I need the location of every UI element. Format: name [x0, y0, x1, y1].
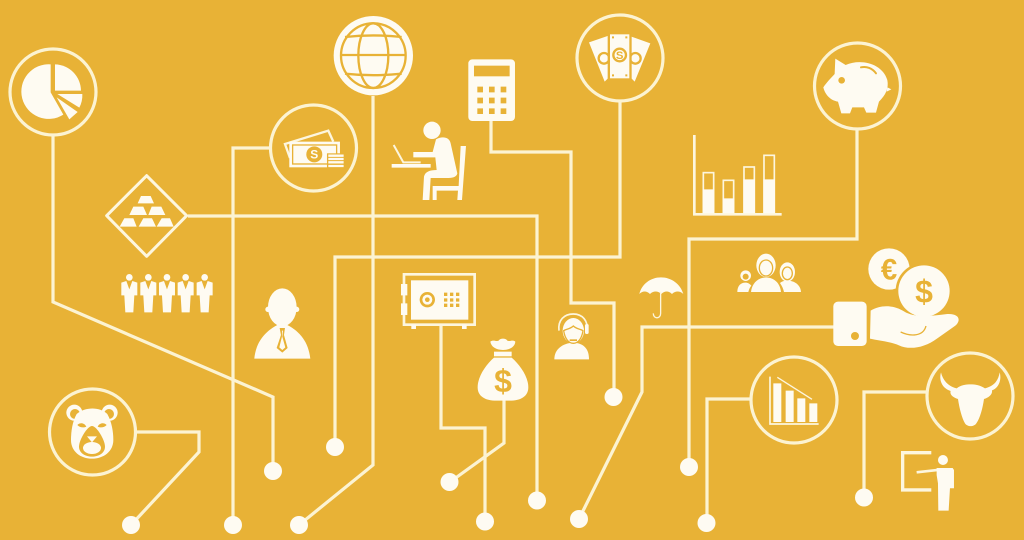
icon: fanned banknotes in circle: S — [616, 50, 624, 62]
connector: hand to node — [570, 327, 835, 528]
hand — [833, 302, 959, 348]
connector: bear to node — [122, 432, 199, 534]
connector: safe to node — [441, 325, 494, 530]
coin: dollar: $ — [915, 273, 933, 309]
icon: cash stack in circle: S — [310, 148, 318, 162]
icon: hand holding euro and dollar coins — [833, 248, 959, 348]
icon: person working at laptop — [392, 122, 466, 200]
connector: banknotes to node — [326, 102, 620, 456]
icon: money bag with dollar sign — [478, 339, 528, 401]
connector: falling chart to node — [698, 399, 750, 532]
icon: support agent with headset — [554, 314, 589, 359]
coin: euro: € — [881, 253, 897, 286]
icon: safe — [401, 274, 475, 329]
icon: piggy bank in circle — [814, 43, 900, 129]
connector: globe to node — [290, 96, 373, 534]
icon: bear in circle — [50, 389, 136, 475]
connector: calculator to node — [491, 121, 622, 406]
icon: fanned banknotes in circle — [577, 15, 663, 101]
icon: presenter at board — [903, 453, 954, 511]
icon: falling bar chart in circle — [751, 357, 837, 443]
icon: group of three people — [737, 254, 801, 292]
icon: row of five business people — [121, 274, 213, 312]
icon: money bag with dollar sign: $ — [494, 363, 512, 399]
connector: pie chart to node — [53, 136, 282, 480]
connector: gold to node — [188, 216, 546, 510]
connector: piggy bank to node — [680, 130, 857, 476]
chart: stacked bar chart — [694, 135, 782, 214]
connector: money bag to node — [440, 400, 504, 491]
icon: globe — [334, 16, 413, 95]
connector: bull to node — [855, 392, 926, 506]
icon: umbrella — [639, 277, 683, 318]
connector: cash to node — [224, 148, 269, 534]
icon: bull head in circle — [927, 353, 1013, 439]
icon: gold bars in diamond — [107, 176, 187, 256]
icon: cash stack in circle — [270, 105, 356, 191]
icon: calculator — [468, 59, 515, 121]
icon: pie chart in circle — [10, 49, 96, 135]
icon: businessman with tie — [254, 288, 310, 359]
